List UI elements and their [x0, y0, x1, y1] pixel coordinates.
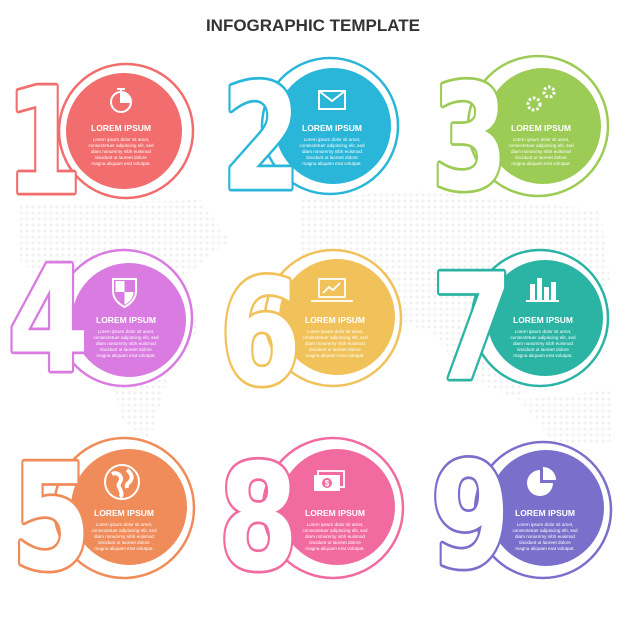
text 7: diam nonummy nibh euismod	[513, 341, 573, 346]
text 4: tincidunt ut laoreet dolore	[100, 347, 152, 352]
text 5: tincidunt ut laoreet dolore	[98, 540, 150, 545]
title: INFOGRAPHIC TEMPLATE	[206, 16, 420, 35]
text 2: diam nonummy nibh euismod	[302, 149, 362, 154]
card 3: 3	[432, 54, 508, 223]
text 1: diam nonummy nibh euismod	[91, 149, 151, 154]
card 8	[219, 433, 403, 603]
text 5	[91, 508, 157, 551]
text 1: consectetuer adipiscing elit, sed	[88, 143, 154, 148]
icon: stopwatch	[111, 89, 131, 112]
text 9: tincidunt ut laoreet dolore	[519, 540, 571, 545]
text 1: Lorem ipsum dolor sit amet,	[93, 137, 149, 142]
icon: money	[314, 471, 344, 491]
text 2: LOREM IPSUM	[302, 123, 362, 133]
card 6: 6	[220, 248, 301, 417]
text 3: diam nonummy nibh euismod	[511, 149, 571, 154]
card 1	[6, 58, 193, 227]
text 3: Lorem ipsum dolor sit amet,	[513, 137, 569, 142]
icon: gears	[528, 87, 554, 110]
card 1: 1	[6, 58, 82, 227]
icon: pie chart	[527, 467, 556, 496]
text 9: Lorem ipsum dolor sit amet,	[517, 522, 573, 527]
text 3: LOREM IPSUM	[511, 123, 571, 133]
text 1: tincidunt ut laoreet dolore	[95, 155, 147, 160]
icon: money: $	[325, 479, 330, 488]
text 8	[302, 508, 368, 551]
text 7	[510, 315, 576, 358]
text 7: magna aliquam erat volutpat.	[513, 353, 573, 358]
text 8: consectetuer adipiscing elit, sed	[302, 528, 368, 533]
text 9	[512, 508, 578, 551]
icon: bar chart	[526, 278, 559, 302]
text 9: diam nonummy nibh euismod	[515, 534, 575, 539]
card 2: 2	[222, 53, 301, 223]
card 6	[220, 248, 401, 417]
text 4: diam nonummy nibh euismod	[96, 341, 156, 346]
text 2: tincidunt ut laoreet dolore	[306, 155, 358, 160]
text 5: magna aliquam erat volutpat.	[94, 546, 154, 551]
text 1	[88, 123, 154, 166]
card 5: 5	[12, 433, 91, 603]
text 8: diam nonummy nibh euismod	[305, 534, 365, 539]
card 2	[222, 53, 398, 223]
card 9	[431, 431, 611, 601]
icon: shield	[113, 279, 136, 307]
text 3: consectetuer adipiscing elit, sed	[508, 143, 574, 148]
text 4: LOREM IPSUM	[96, 315, 156, 325]
card 7: 7	[432, 243, 513, 412]
text 7: consectetuer adipiscing elit, sed	[510, 335, 576, 340]
text 4: consectetuer adipiscing elit, sed	[93, 335, 159, 340]
card 7: 7	[432, 243, 513, 412]
text 9: consectetuer adipiscing elit, sed	[512, 528, 578, 533]
text 4: Lorem ipsum dolor sit amet,	[98, 329, 154, 334]
card 6: 6	[220, 248, 301, 417]
text 2: Lorem ipsum dolor sit amet,	[304, 137, 360, 142]
card 8: 8	[219, 433, 298, 603]
text 5: consectetuer adipiscing elit, sed	[91, 528, 157, 533]
text 4: magna aliquam erat volutpat.	[96, 353, 156, 358]
text 3	[508, 123, 574, 166]
card 3	[432, 54, 608, 223]
text 8: Lorem ipsum dolor sit amet,	[307, 522, 363, 527]
card 7	[432, 243, 608, 412]
text 2: consectetuer adipiscing elit, sed	[299, 143, 365, 148]
card 9: 9	[431, 431, 510, 601]
card 5: 5	[12, 433, 91, 603]
text 5: diam nonummy nibh euismod	[94, 534, 154, 539]
text 1: magna aliquam erat volutpat.	[91, 161, 151, 166]
text 8: magna aliquam erat volutpat.	[305, 546, 365, 551]
text 8: tincidunt ut laoreet dolore	[309, 540, 361, 545]
background world map dots	[20, 190, 615, 450]
card 2: 2	[222, 53, 301, 223]
icon: laptop chart	[311, 279, 353, 301]
card 3: 3	[432, 54, 508, 223]
card 4: 4	[8, 235, 89, 404]
text 3: magna aliquam erat volutpat.	[511, 161, 571, 166]
text 7: LOREM IPSUM	[513, 315, 573, 325]
text 9: LOREM IPSUM	[515, 508, 575, 518]
text 7: Lorem ipsum dolor sit amet,	[515, 329, 571, 334]
card 4	[8, 235, 192, 404]
text 4	[93, 315, 159, 358]
icon: envelope	[319, 91, 345, 109]
text 3: tincidunt ut laoreet dolore	[515, 155, 567, 160]
text 6: diam nonummy nibh euismod	[305, 341, 365, 346]
card 1: 1	[6, 58, 82, 227]
text 9: magna aliquam erat volutpat.	[515, 546, 575, 551]
text 6: LOREM IPSUM	[305, 315, 365, 325]
text 6: magna aliquam erat volutpat.	[305, 353, 365, 358]
text 1: LOREM IPSUM	[91, 123, 151, 133]
text 6: Lorem ipsum dolor sit amet,	[307, 329, 363, 334]
text 6: tincidunt ut laoreet dolore	[309, 347, 361, 352]
text 7: tincidunt ut laoreet dolore	[517, 347, 569, 352]
text 5: LOREM IPSUM	[94, 508, 154, 518]
card 4: 4	[8, 235, 89, 404]
text 2: magna aliquam erat volutpat.	[302, 161, 362, 166]
icon: globe	[105, 465, 139, 499]
card 5	[12, 433, 194, 603]
text 6: consectetuer adipiscing elit, sed	[302, 335, 368, 340]
card 8: 8	[219, 433, 298, 603]
text 6	[302, 315, 368, 358]
text 5: Lorem ipsum dolor sit amet,	[96, 522, 152, 527]
text 2	[299, 123, 365, 166]
text 8: LOREM IPSUM	[305, 508, 365, 518]
card 9: 9	[431, 431, 510, 601]
